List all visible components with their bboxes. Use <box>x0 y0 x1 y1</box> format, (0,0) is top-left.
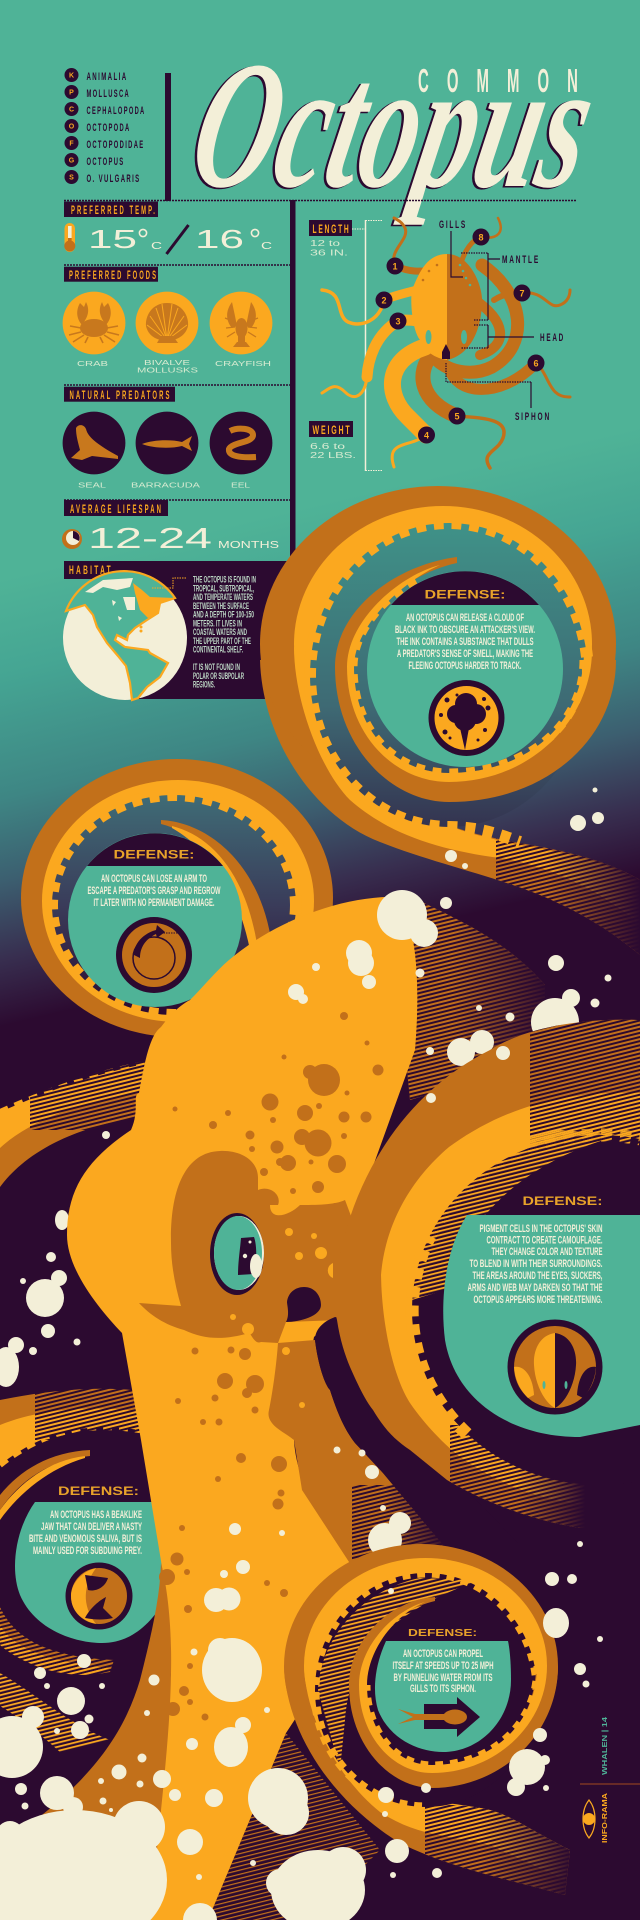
icon: crab <box>69 302 119 343</box>
taxonomy list: O <box>69 124 75 130</box>
taxonomy list: OCTOPUS <box>86 156 124 168</box>
taxonomy list: ANIMALIA <box>86 71 128 83</box>
taxonomy list: F <box>69 140 74 148</box>
icon: crayfish <box>225 302 258 347</box>
defense card: beak <box>15 1486 165 1643</box>
taxonomy list: OCTOPODA <box>86 122 130 134</box>
length label: 12 to <box>310 239 341 248</box>
panel: habitat: AND TEMPERATE WATERS <box>193 592 253 603</box>
weight label: WEIGHT <box>312 425 352 437</box>
signature and logo <box>580 1716 640 1843</box>
panel: preferred foods <box>63 267 272 374</box>
panel: anatomy diagram <box>309 218 570 471</box>
panel: preferred temperature: C <box>151 241 162 252</box>
defense card: beak: DEFENSE: <box>58 1486 139 1498</box>
panel: habitat: IT IS NOT FOUND IN <box>193 662 240 673</box>
panel: anatomy diagram: 7 <box>519 288 525 298</box>
signature and logo: INFO-RAMA <box>600 1792 609 1843</box>
panel: preferred temperature: C <box>261 241 272 252</box>
title: Octopus <box>177 24 611 226</box>
bubbles behind the octopus <box>0 788 612 1387</box>
large right tentacle ring with camouflage card <box>335 1015 640 1535</box>
panel: anatomy diagram: 1 <box>392 262 398 272</box>
icon: scallop shell <box>146 303 188 343</box>
defense card: regrow arm: AN OCTOPUS CAN LOSE AN ARM TO <box>101 873 207 885</box>
length label: LENGTH <box>312 224 350 236</box>
lower left orange arm <box>0 1563 180 1920</box>
length label <box>309 220 352 258</box>
panel: habitat: HABITAT <box>69 565 113 577</box>
taxonomy list <box>64 68 146 185</box>
foreground bubbles <box>0 890 603 1920</box>
signature and logo: WHALEN | 14 <box>600 1716 609 1775</box>
icon: seal <box>71 425 118 460</box>
bubbles behind lower ring <box>334 1446 411 1557</box>
defense card: beak: BITE AND VENOMOUS SALIVA, BUT IS <box>29 1533 142 1545</box>
weight label <box>309 421 356 460</box>
tentacle ring: upper left, lose an arm <box>21 759 333 1037</box>
defense card: regrow arm: ESCAPE A PREDATOR'S GRASP AND REGROW <box>88 885 221 897</box>
taxonomy list: OCTOPODIDAE <box>86 139 144 151</box>
anatomy callouts <box>439 219 565 423</box>
panel: preferred temperature <box>64 202 272 254</box>
anatomy callouts: GILLS <box>439 219 467 231</box>
icon: jetting octopus arrow <box>398 1697 480 1737</box>
defense card: regrow arm: DEFENSE: <box>114 850 194 862</box>
panel: preferred foods: BIVALVE <box>144 358 190 367</box>
taxonomy list: O. VULGARIS <box>86 173 140 185</box>
hatched arm behind head <box>407 902 545 1100</box>
taxonomy list: CEPHALOPODA <box>86 105 146 117</box>
taxonomy list: K <box>69 72 74 80</box>
panel: natural predators: SEAL <box>78 480 106 490</box>
left arm lower ring with beak card <box>0 1378 165 1752</box>
panel: habitat: COASTAL WATERS AND <box>193 627 247 638</box>
panel: anatomy diagram: 4 <box>424 430 429 440</box>
weight label: 22 LBS. <box>310 451 356 460</box>
anatomy callouts: MANTLE <box>502 254 540 266</box>
panel: preferred temperature: PREFERRED TEMP. <box>71 205 157 217</box>
panel: habitat: AND A DEPTH OF 100-150 <box>193 610 254 621</box>
panel: anatomy diagram: 5 <box>454 412 460 422</box>
defense card: regrow arm: IT LATER WITH NO PERMANENT DAMAGE. <box>94 897 214 909</box>
yellow dots on patch <box>230 1228 333 1408</box>
panel: anatomy diagram: 8 <box>478 232 484 242</box>
panel: average lifespan <box>62 500 279 555</box>
defense card: jet propulsion: DEFENSE: <box>408 1628 477 1639</box>
icon: regrowing arm <box>116 917 192 993</box>
panel: habitat: METERS. IT LIVES IN <box>193 618 242 629</box>
icon: eel <box>229 429 256 457</box>
defense card: camouflage <box>443 1196 640 1437</box>
eye <box>210 1213 264 1295</box>
icon: barracuda <box>142 436 192 451</box>
defense card: jet propulsion <box>375 1628 511 1752</box>
octopus head and body <box>67 897 417 1920</box>
defense card: ink cloud <box>367 571 563 767</box>
panel: habitat: THE UPPER PART OF THE <box>193 636 251 647</box>
defense card: beak: AN OCTOPUS HAS A BEAKLIKE <box>50 1509 142 1521</box>
panel: habitat: POLAR OR SUBPOLAR <box>193 671 244 682</box>
panel: habitat: REGIONS. <box>193 680 215 691</box>
taxonomy list: G <box>69 158 75 164</box>
taxonomy list: C <box>69 106 74 114</box>
panel: preferred temperature: 16 <box>195 224 244 254</box>
panel: anatomy diagram: 3 <box>395 316 401 326</box>
icon: half camouflaged octopus <box>508 1320 602 1414</box>
defense card: jet propulsion: BY FUNNELING WATER FROM ITS <box>394 1672 492 1684</box>
defense card: jet propulsion: AN OCTOPUS CAN PROPEL <box>403 1648 483 1660</box>
length label: 36 IN. <box>310 248 348 258</box>
panel: habitat: CONTINENTAL SHELF. <box>193 645 243 656</box>
anatomy callouts: HEAD <box>540 332 565 344</box>
anatomy callouts: SIPHON <box>515 411 551 423</box>
panel: preferred foods: PREFERRED FOODS <box>69 270 158 282</box>
panel: habitat: THE OCTOPUS IS FOUND IN <box>193 574 256 586</box>
tentacle ring: upper right, ink defense <box>260 486 640 960</box>
taxonomy list: P <box>69 90 74 96</box>
bottom right tentacle ring with jet card <box>284 1544 575 1900</box>
lower dark fill <box>0 1030 640 1920</box>
left arm upper band <box>0 1055 155 1187</box>
lower center hatched arm <box>208 1733 380 1920</box>
panel: anatomy diagram: 2 <box>381 296 387 306</box>
globe <box>63 571 187 700</box>
center arm <box>268 1340 447 1570</box>
panel: preferred foods: CRAYFISH <box>215 359 271 368</box>
defense card: jet propulsion: GILLS TO ITS SIPHON. <box>410 1683 476 1695</box>
panel: average lifespan: AVERAGE LIFESPAN <box>70 504 163 516</box>
title: Octopus <box>174 25 609 227</box>
defense card: ink cloud: AN OCTOPUS CAN RELEASE A CLOUD OF <box>406 612 524 624</box>
defense card: beak: JAW THAT CAN DELIVER A NASTY <box>41 1521 142 1533</box>
mouth <box>286 1287 321 1322</box>
defense card: regrow arm <box>68 833 242 1007</box>
dark crescent under arm <box>315 1317 520 1545</box>
panel: habitat <box>63 561 296 700</box>
octopus diagram <box>322 218 570 468</box>
panel: average lifespan: 12-24 <box>88 523 212 555</box>
taxonomy list: MOLLUSCA <box>86 88 130 100</box>
panel: preferred foods: MOLLUSKS <box>137 366 198 374</box>
panel: habitat: TROPICAL, SUBTROPICAL, <box>193 583 254 594</box>
icon: beak <box>66 1562 132 1630</box>
panel: preferred temperature: 15 <box>88 224 137 254</box>
panel: natural predators <box>63 387 272 490</box>
defense card: ink cloud: DEFENSE: <box>424 590 506 602</box>
defense card: beak: MAINLY USED FOR SUBDUING PREY. <box>33 1545 142 1557</box>
panel: habitat: BETWEEN THE SURFACE <box>193 601 249 612</box>
defense card: camouflage: DEFENSE: <box>522 1196 602 1208</box>
taxonomy list: S <box>69 174 74 182</box>
defense card: jet propulsion: ITSELF AT SPEEDS UP TO 25 MPH <box>392 1660 494 1672</box>
weight label: 6.6 to <box>310 442 346 451</box>
panel: natural predators: NATURAL PREDATORS <box>70 390 172 402</box>
icon: ink cloud <box>428 680 504 756</box>
panel: natural predators: EEL <box>231 480 250 490</box>
eye patch <box>139 1151 360 1343</box>
number badges <box>376 228 544 444</box>
panel: natural predators: BARRACUDA <box>131 480 200 490</box>
panel: average lifespan: MONTHS <box>218 539 279 551</box>
panel: preferred foods: CRAB <box>77 359 108 368</box>
panel: anatomy diagram: 6 <box>533 358 539 368</box>
octopus skin spots <box>170 1012 384 1720</box>
defense card: ink cloud: FLEEING OCTOPUS HARDER TO TRACK. <box>408 660 522 672</box>
